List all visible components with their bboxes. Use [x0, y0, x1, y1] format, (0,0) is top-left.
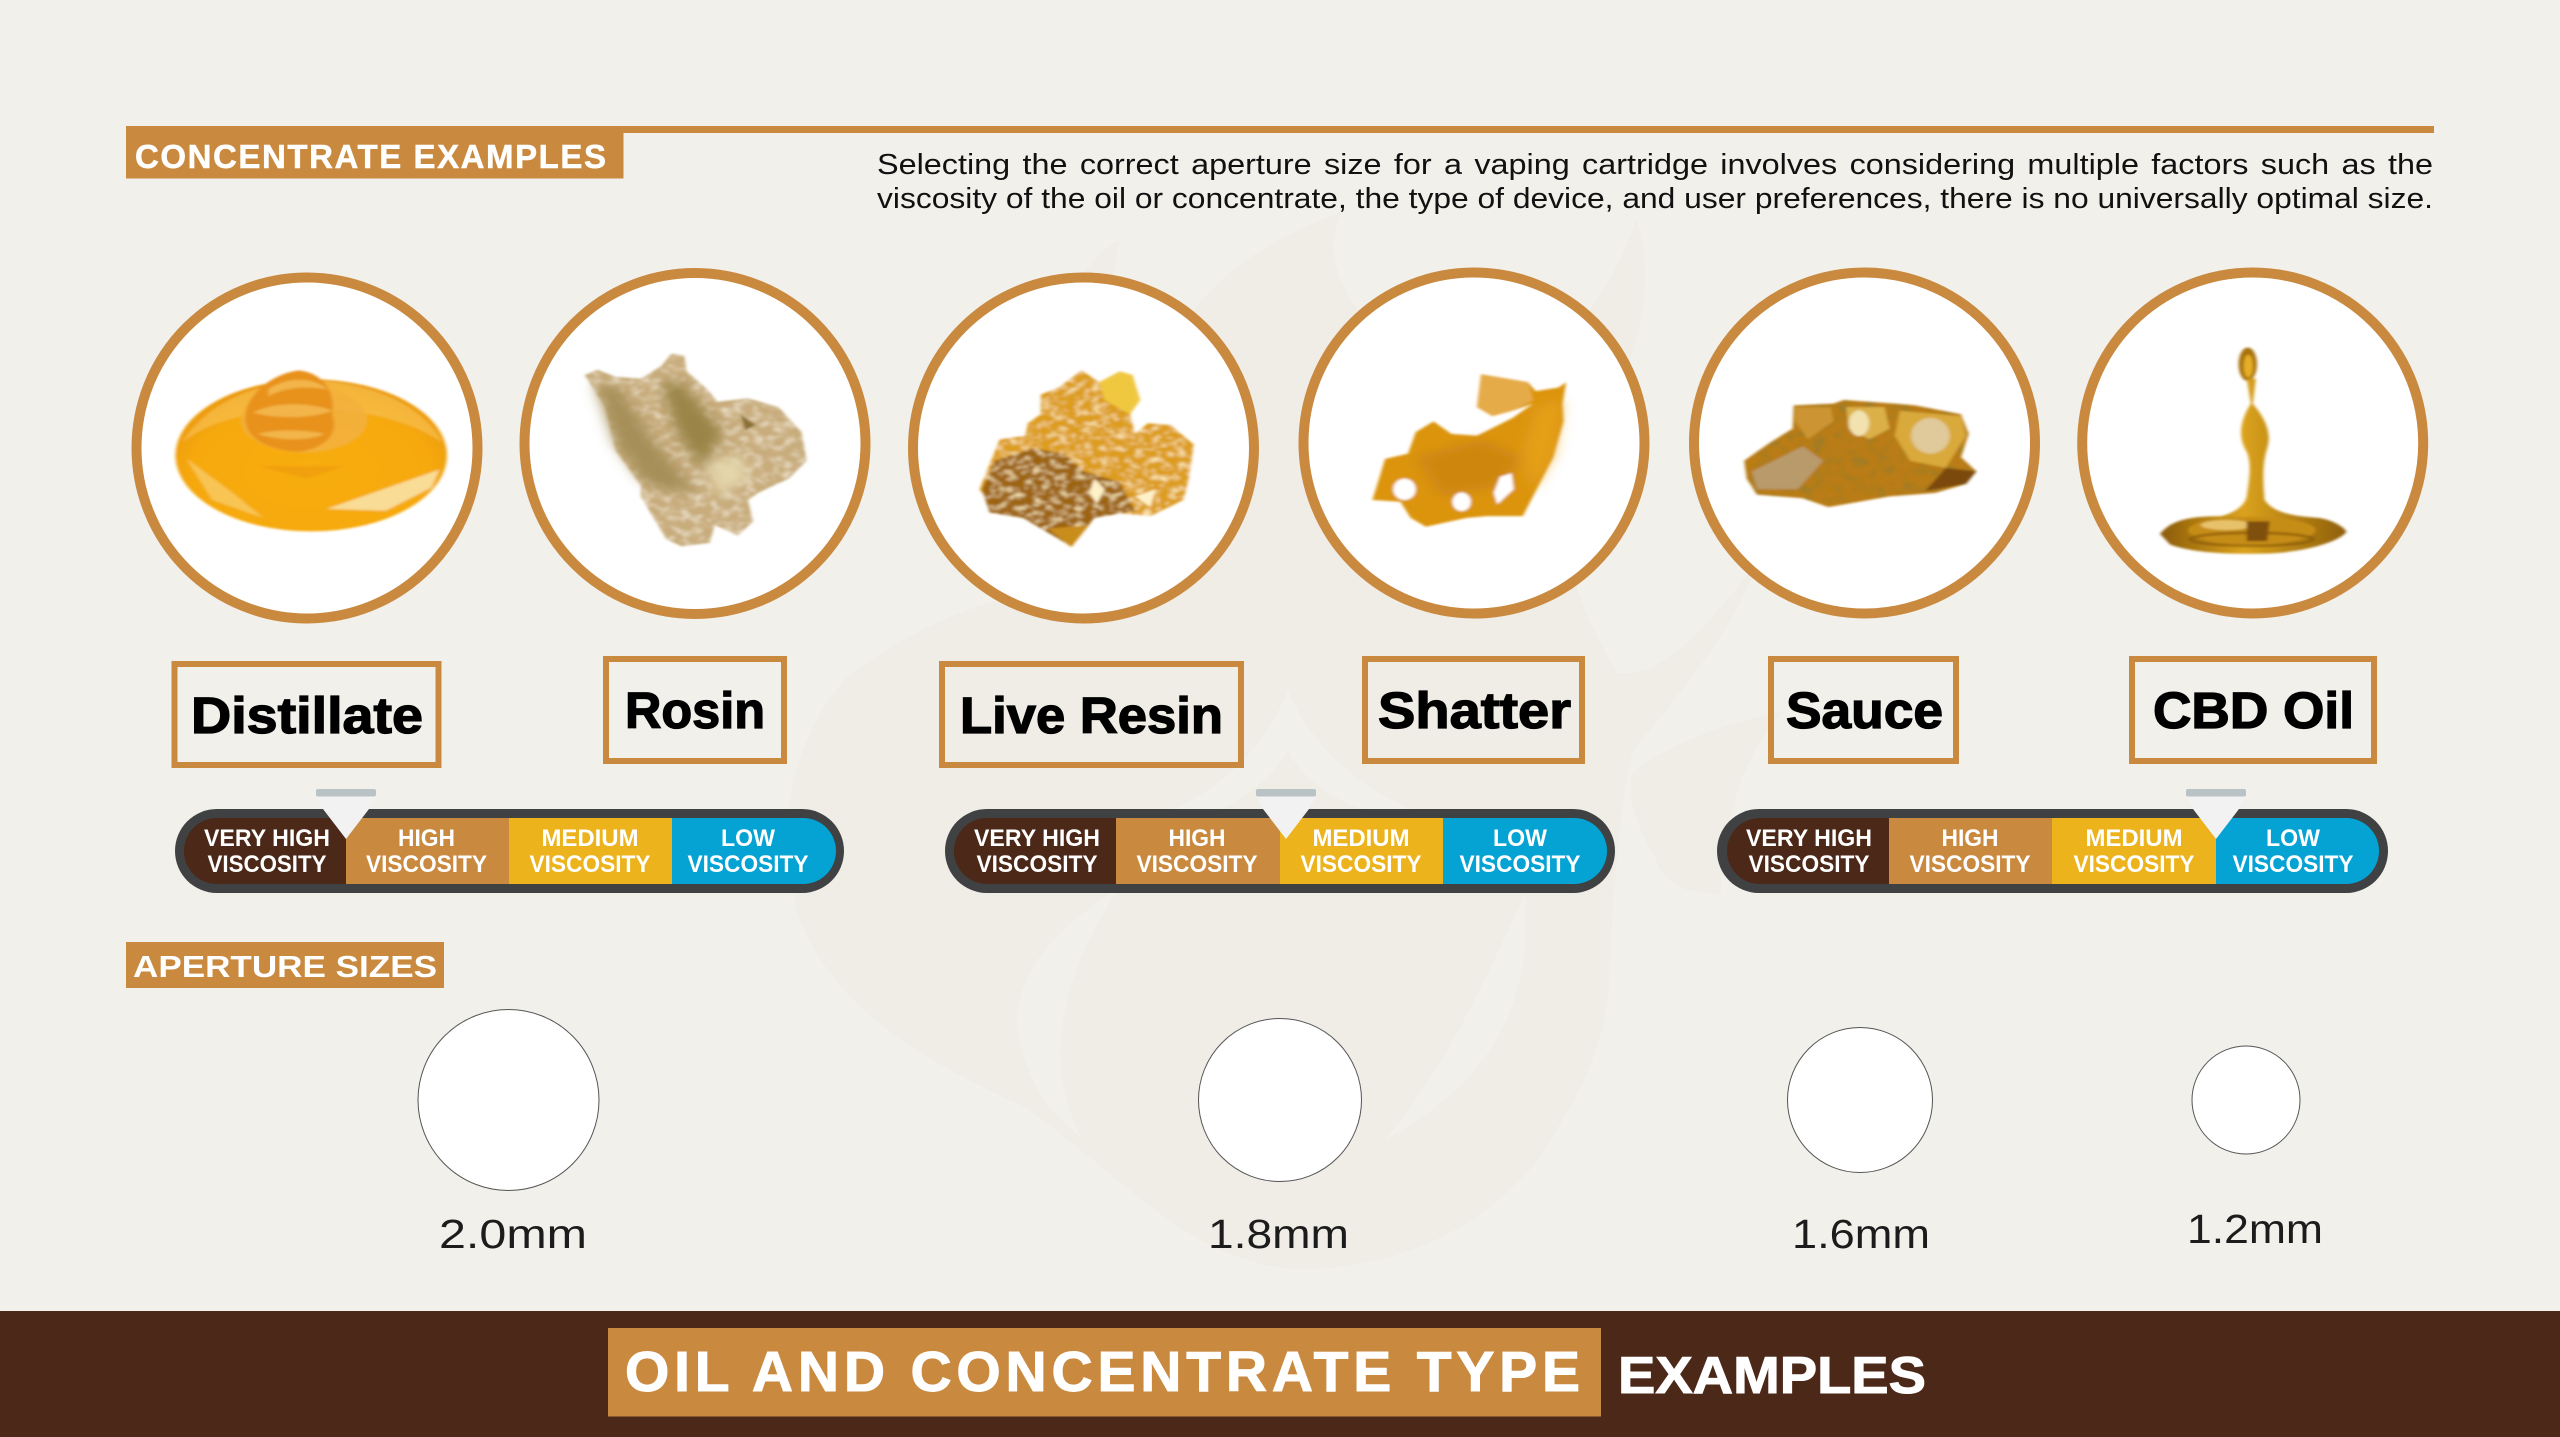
aperture: 1.8mm	[1198, 1018, 1362, 1257]
viscosity scale: very high: VISCOSITY	[688, 851, 808, 878]
pointer	[2186, 789, 2246, 839]
label: rosin: Rosin	[625, 682, 765, 739]
icon: live resin cluster	[979, 370, 1194, 547]
viscosity scale: very high: VISCOSITY	[530, 851, 650, 878]
label: live resin: Live Resin	[960, 687, 1223, 744]
icon: distillate puddle	[176, 370, 447, 531]
viscosity scale: high-medium: VERY HIGH	[974, 825, 1100, 852]
label: rosin	[606, 659, 784, 761]
viscosity scale: very high: LOW	[721, 825, 775, 852]
viscosity scale: medium-low: VISCOSITY	[1748, 851, 1870, 878]
aperture: 1.6mm: 1.6mm	[1792, 1211, 1930, 1257]
title suffix: EXAMPLES	[1618, 1347, 1926, 1405]
viscosity scale: medium-low: MEDIUM	[2086, 825, 2182, 852]
heading: aperture sizes	[126, 942, 444, 988]
icon: cbd oil drip	[2160, 347, 2346, 554]
viscosity scale: medium-low: HIGH	[1942, 825, 1998, 852]
label: cbd oil	[2132, 659, 2374, 761]
intro text	[877, 149, 2433, 215]
viscosity scale: high-medium: VISCOSITY	[1136, 851, 1258, 878]
label: distillate	[174, 664, 438, 765]
panel: sauce photo	[1694, 272, 2035, 614]
aperture: 2.0mm	[418, 1010, 599, 1257]
viscosity scale: very high: VISCOSITY	[366, 851, 487, 878]
heading: concentrate examples: CONCENTRATE EXAMPLES	[135, 138, 606, 175]
viscosity scale: very high	[175, 789, 844, 893]
viscosity scale: high-medium: MEDIUM	[1312, 825, 1410, 852]
label: shatter	[1365, 659, 1582, 761]
viscosity scale: medium-low: VISCOSITY	[2232, 851, 2354, 878]
aperture: 1.8mm: 1.8mm	[1208, 1211, 1349, 1257]
icon: sauce chunk	[1744, 400, 1976, 507]
viscosity scale: medium-low: VERY HIGH	[1746, 825, 1872, 852]
viscosity scale: very high: VERY HIGH	[204, 825, 330, 852]
viscosity scale: high-medium: VISCOSITY	[1300, 851, 1422, 878]
viscosity scale: medium-low	[1717, 789, 2388, 893]
aperture: 2.0mm: 2.0mm	[439, 1211, 587, 1257]
viscosity scale: high-medium	[945, 789, 1615, 893]
aperture: 1.2mm: 1.2mm	[2187, 1206, 2323, 1252]
panel: shatter photo	[1304, 272, 1644, 614]
footer band	[0, 1311, 2560, 1437]
panel: live resin photo	[913, 278, 1254, 618]
icon: rosin lump	[585, 354, 807, 546]
intro text: viscosity of the oil or concentrate, the type of device, and user preferences, there is no universally optimal size.	[877, 183, 2433, 215]
viscosity scale: high-medium: VISCOSITY	[1460, 851, 1580, 878]
label: shatter: Shatter	[1378, 682, 1571, 739]
label: sauce	[1771, 659, 1956, 761]
panel: cbd oil photo	[2082, 272, 2423, 614]
title	[608, 1328, 1601, 1416]
icon: shatter shard	[1372, 374, 1566, 527]
title: OIL AND CONCENTRATE TYPE	[625, 1340, 1580, 1404]
viscosity scale: very high: VISCOSITY	[208, 851, 326, 878]
pointer	[316, 789, 376, 839]
viscosity scale: medium-low: VISCOSITY	[2074, 851, 2194, 878]
label: distillate: Distillate	[191, 687, 423, 744]
viscosity scale: medium-low: VISCOSITY	[1910, 851, 2030, 878]
viscosity scale: high-medium: HIGH	[1168, 825, 1226, 852]
viscosity scale: very high: MEDIUM	[542, 825, 638, 852]
viscosity scale: high-medium: VISCOSITY	[976, 851, 1098, 878]
pointer	[1256, 789, 1316, 839]
label: cbd oil: CBD Oil	[2153, 682, 2354, 739]
aperture: 1.2mm	[2187, 1046, 2323, 1252]
label: sauce: Sauce	[1786, 682, 1943, 739]
viscosity scale: medium-low: LOW	[2266, 825, 2320, 852]
panel: rosin photo	[524, 273, 866, 614]
panel: distillate photo	[136, 278, 478, 618]
intro text: Selecting the correct aperture size for a vaping cartridge involves considering multiple factors such as the	[877, 149, 2433, 181]
viscosity scale: very high: HIGH	[398, 825, 455, 852]
heading: aperture sizes: APERTURE SIZES	[133, 949, 437, 984]
viscosity scale: high-medium: LOW	[1493, 825, 1547, 852]
watermark flame	[788, 212, 1782, 1269]
aperture: 1.6mm	[1788, 1028, 1932, 1257]
label: live resin	[942, 664, 1241, 765]
section rule	[126, 126, 2434, 133]
